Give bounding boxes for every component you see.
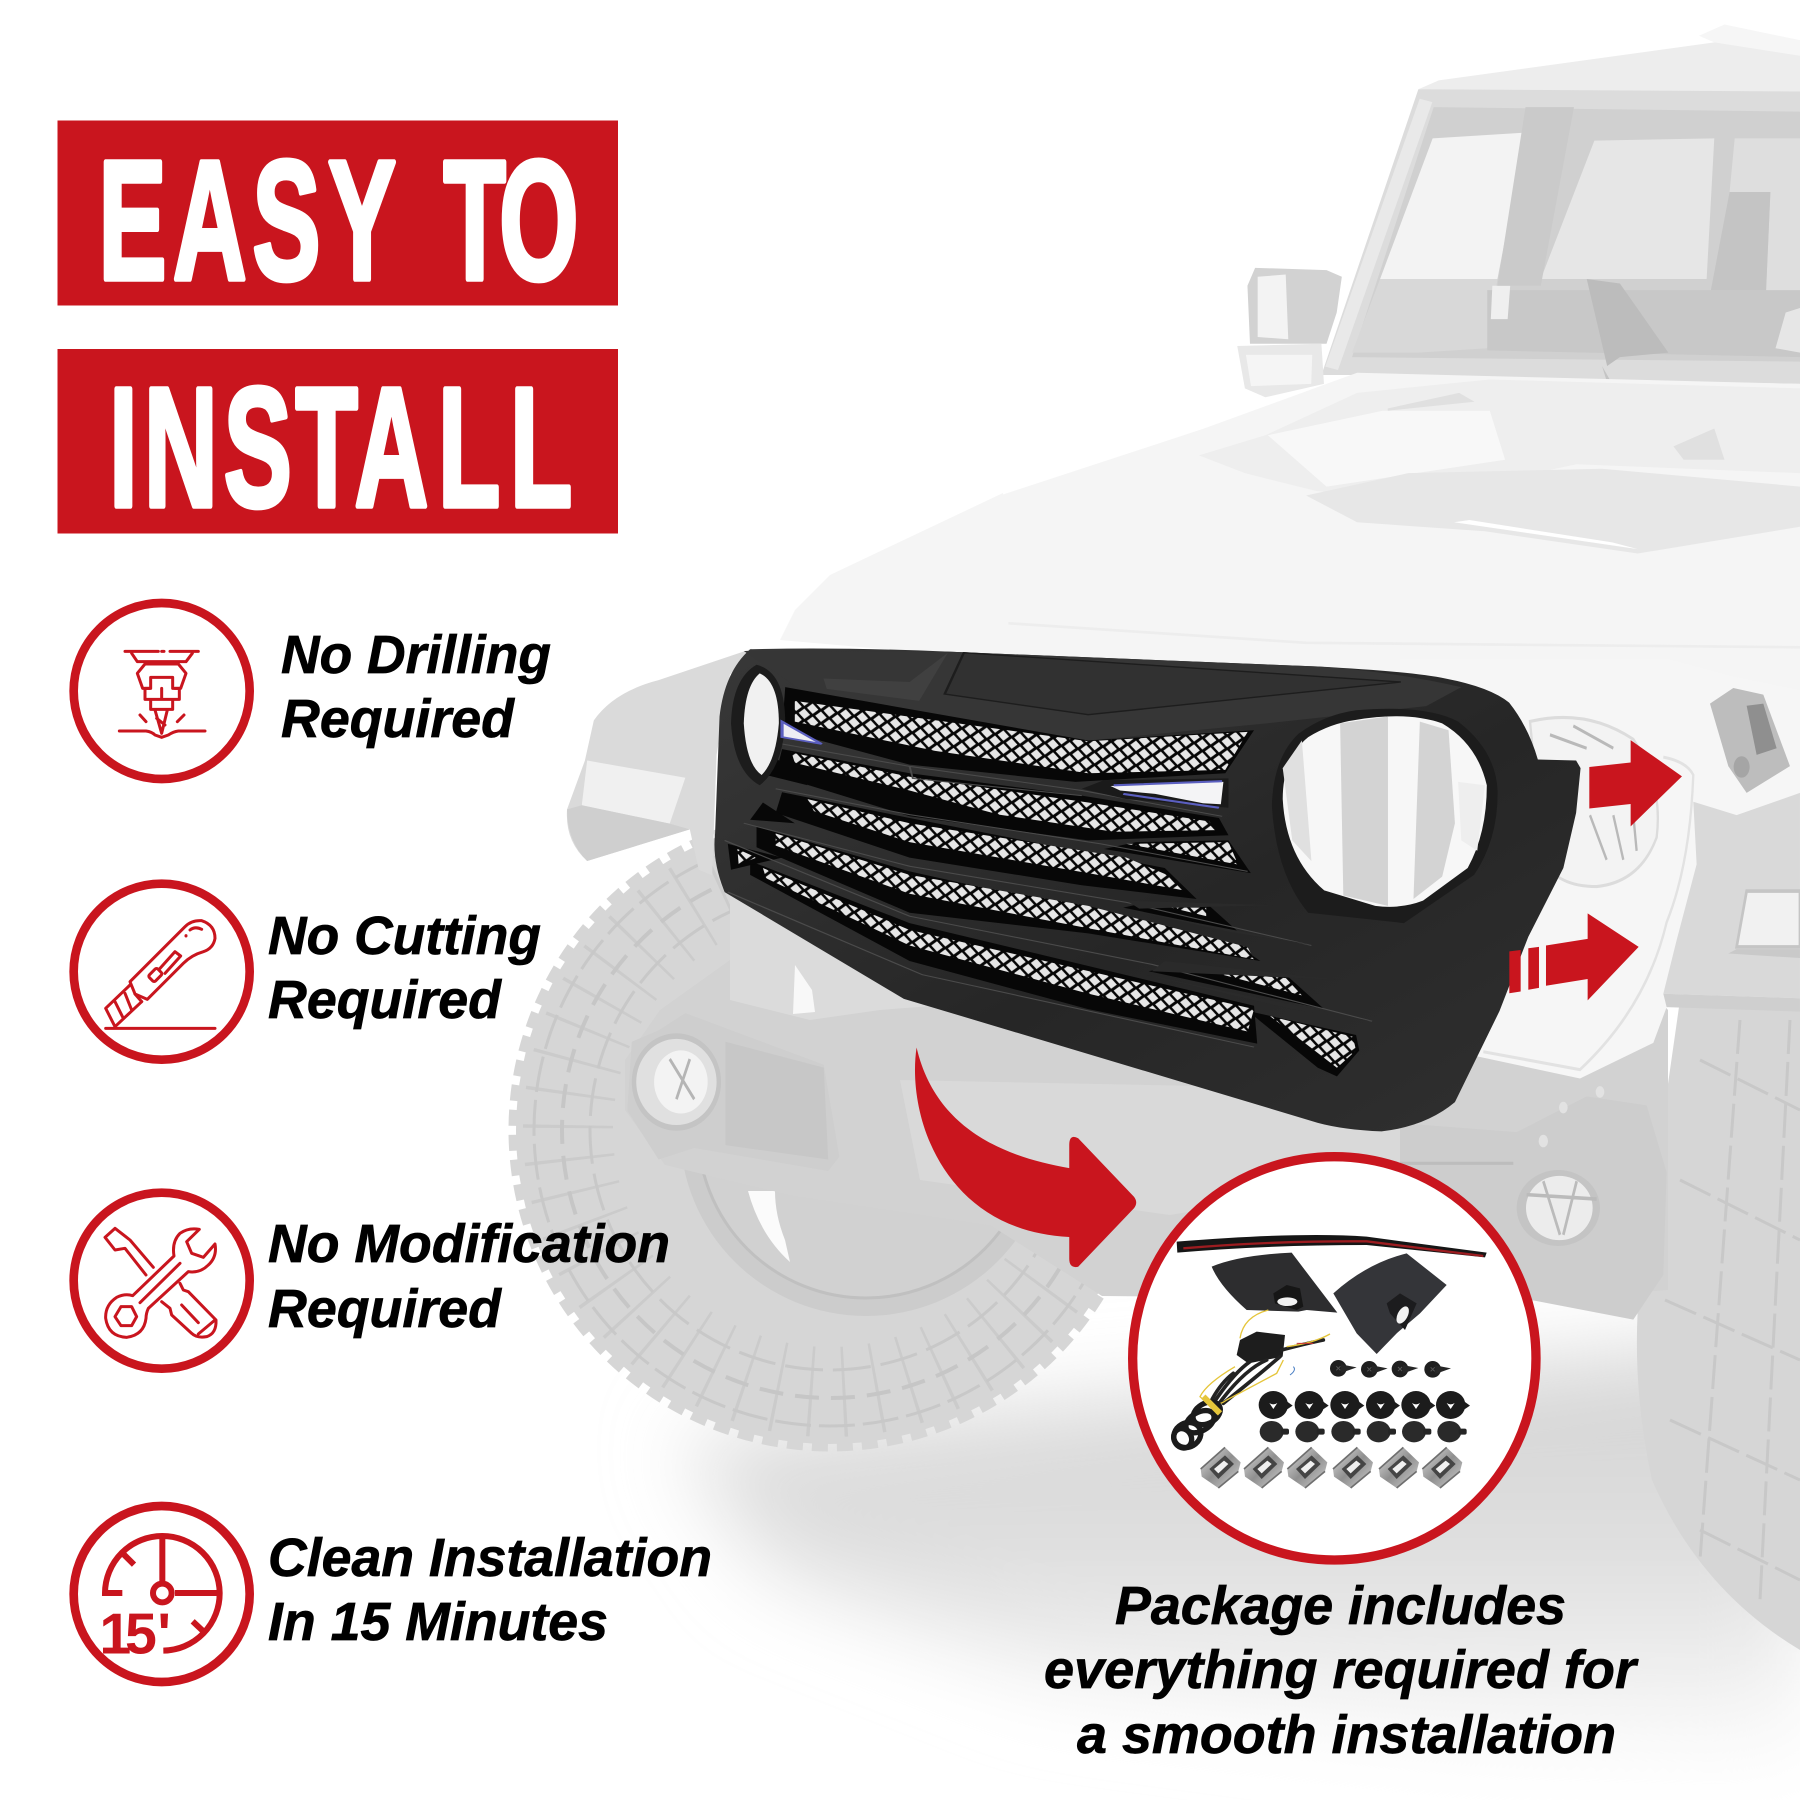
left tyre — [513, 813, 1147, 1447]
metal clips — [1201, 1447, 1462, 1488]
pins row — [1260, 1421, 1467, 1442]
icon: no drilling — [74, 603, 250, 779]
arrow: lower right with stripes — [1509, 913, 1639, 1000]
left lamp opening — [731, 665, 785, 785]
grille brow — [744, 651, 1461, 741]
text: no modification — [268, 1214, 670, 1339]
left bracket — [1212, 1253, 1337, 1313]
text: no cutting: No Cutting — [268, 906, 541, 966]
LED light right — [1082, 778, 1229, 808]
right lamp ring — [1272, 709, 1498, 923]
right bracket — [1333, 1253, 1447, 1354]
left fender and turn signal — [567, 649, 752, 875]
panel: package contents — [1133, 1157, 1536, 1560]
right tyre — [1637, 1000, 1800, 1650]
curved arrow to package — [915, 1048, 1136, 1267]
icon: 15 minute clock: 15' — [99, 1602, 171, 1666]
text: no drilling: Required — [281, 689, 515, 749]
screws — [1330, 1360, 1451, 1378]
package caption: Package includes — [1115, 1576, 1566, 1636]
mesh strips — [737, 701, 1356, 1068]
arrow: upper right — [1589, 740, 1682, 826]
text: clean installation: Clean Installation — [268, 1528, 712, 1588]
title banner: install: INSTALL — [109, 352, 572, 542]
package circle — [1133, 1157, 1536, 1560]
ground shadow under vehicle — [680, 1340, 1800, 1750]
text: no cutting — [268, 906, 541, 1030]
text: no modification: Required — [268, 1279, 502, 1339]
grille body — [714, 648, 1581, 1131]
package caption: a smooth installation — [1077, 1705, 1616, 1765]
slat highlights — [725, 744, 1372, 1047]
text: clean installation: In 15 Minutes — [268, 1592, 608, 1652]
right fog lamp housing — [1400, 1086, 1667, 1320]
icon: no cutting — [74, 884, 250, 1060]
seal strip — [1177, 1235, 1487, 1257]
text: no cutting: Required — [268, 970, 502, 1030]
text: no modification: No Modification — [268, 1214, 670, 1274]
LED light left — [782, 722, 822, 744]
package caption — [1044, 1576, 1639, 1765]
icon: no modification — [74, 1193, 250, 1369]
wiring harness — [1169, 1310, 1330, 1452]
hood and cabin — [1000, 25, 1800, 700]
grille product — [714, 648, 1581, 1131]
title banner: easy to: EASY TO — [99, 125, 579, 315]
text: no drilling: No Drilling — [281, 625, 551, 685]
spike tips — [1126, 901, 1372, 1021]
text: no drilling — [281, 625, 551, 749]
rivets row — [1259, 1391, 1470, 1419]
faded vehicle photo — [513, 25, 1800, 1650]
right fender and headlight — [1400, 659, 1800, 1079]
black slots — [728, 687, 1359, 1076]
text: clean installation — [268, 1528, 712, 1652]
right lamp opening — [1283, 716, 1487, 907]
left hood edge — [780, 493, 1010, 660]
icon: 15 minute clock — [74, 1506, 250, 1682]
left fog lamp housing — [627, 1013, 839, 1171]
package caption: everything required for — [1044, 1640, 1639, 1700]
front bumper — [625, 880, 1668, 1320]
